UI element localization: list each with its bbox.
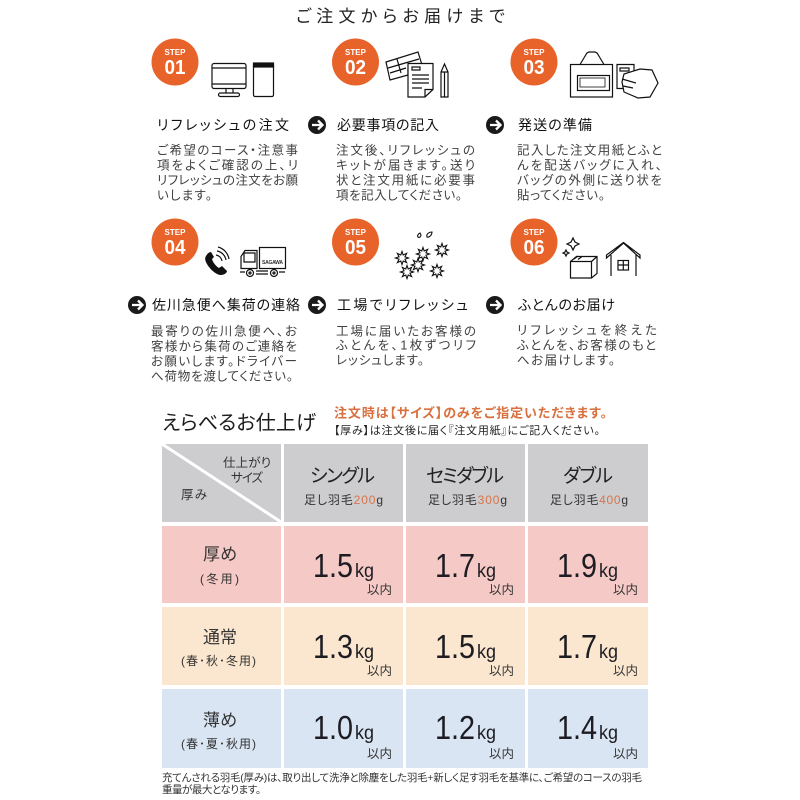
row: thick: kg bbox=[599, 561, 618, 582]
row: thin: 1.4 bbox=[557, 709, 597, 746]
row: thin: 薄め bbox=[203, 711, 237, 730]
order note: 【厚み】は注文後に届く『注文用紙』にご記入ください。 bbox=[334, 423, 600, 437]
badge: step 02: 02 bbox=[345, 57, 366, 79]
row: thin: kg bbox=[477, 723, 496, 744]
text block: ご希望のコース・注意事 bbox=[157, 142, 298, 158]
row: thick: 以内 bbox=[367, 583, 392, 597]
text block: ふとんを、1枚ずつリフ bbox=[335, 338, 476, 352]
text block: 注文後、リフレッシュの bbox=[336, 144, 475, 158]
text block: バッグの外側に送り状を bbox=[517, 172, 662, 188]
text block: レッシュします。 bbox=[336, 354, 424, 368]
text block: リフレッシュを終えた bbox=[517, 322, 657, 338]
row: normal: 以内 bbox=[613, 664, 638, 678]
badge: step 06: 06 bbox=[524, 237, 544, 259]
text block: お願いします。ドライバー bbox=[151, 354, 297, 368]
text block: んを配送バッグに入れ、 bbox=[517, 158, 662, 172]
row: thick: (冬用) bbox=[200, 571, 239, 586]
row: normal: 以内 bbox=[367, 664, 392, 678]
title: ご注文からお届けまで bbox=[296, 7, 505, 26]
panel: step 6 bbox=[486, 218, 657, 368]
badge: step 03: 03 bbox=[524, 57, 544, 79]
row: thin: 以内 bbox=[367, 747, 392, 761]
badge: step 04: STEP bbox=[165, 228, 186, 237]
icon: phone bbox=[205, 247, 229, 275]
order note bbox=[334, 406, 607, 437]
badge: step 03 bbox=[510, 38, 558, 86]
row: thin: 1.2 bbox=[435, 709, 475, 746]
row: normal: 通常 bbox=[203, 628, 237, 647]
text block bbox=[151, 324, 297, 384]
badge: step 01: STEP bbox=[165, 48, 186, 57]
text block: 客様から集荷のご連絡を bbox=[151, 338, 297, 354]
row: thin: 1.0 bbox=[313, 709, 353, 746]
row: thin: kg bbox=[355, 723, 374, 744]
panel: step 4 bbox=[128, 218, 300, 384]
table bbox=[162, 444, 648, 768]
panel: step 5 bbox=[308, 218, 476, 368]
header row: 厚み bbox=[181, 488, 207, 502]
row: thick: 以内 bbox=[489, 583, 514, 597]
header row: 足し羽毛200g bbox=[304, 493, 383, 507]
header row: 足し羽毛400g bbox=[550, 493, 628, 507]
text block: へ荷物を渡してください。 bbox=[151, 370, 293, 384]
row: normal: 1.5 bbox=[435, 628, 475, 665]
icon: monitor and smartphone bbox=[212, 63, 274, 96]
badge: step 01 bbox=[152, 38, 198, 86]
footnote: 充てんされる羽毛(厚み)は、取り出して洗浄と除塵をした羽毛+新しく足す羽毛を基準に、ご希望のコースの羽毛 bbox=[162, 771, 642, 784]
header row: シングル bbox=[310, 465, 375, 487]
heading: ふとんのお届け bbox=[517, 297, 615, 313]
section heading: えらべるお仕上げ bbox=[162, 412, 316, 434]
badge: step 02: STEP bbox=[345, 48, 367, 57]
row: thick: 1.5 bbox=[313, 547, 353, 584]
text block: 貼ってください。 bbox=[517, 188, 605, 202]
heading: 佐川急便へ集荷の連絡 bbox=[152, 297, 300, 313]
panel: step 1 bbox=[152, 38, 298, 202]
row: thick: 厚め bbox=[203, 545, 237, 564]
text block: へお届けします。 bbox=[517, 354, 615, 368]
header row: サイズ bbox=[231, 470, 263, 485]
row: thick bbox=[162, 526, 648, 603]
arrow bbox=[128, 296, 146, 314]
heading: 必要事項の記入 bbox=[337, 117, 439, 133]
row: normal: 1.3 bbox=[313, 628, 353, 665]
icon: box with sparkles bbox=[563, 238, 597, 278]
text block: リフレッシュの注文をお願 bbox=[157, 174, 298, 188]
arrow bbox=[486, 296, 504, 314]
icon: house bbox=[606, 242, 640, 276]
row: thin: 以内 bbox=[613, 747, 638, 761]
row: thick: 1.7 bbox=[435, 547, 475, 584]
row: thick: kg bbox=[355, 561, 374, 582]
icon: truck bbox=[240, 248, 286, 276]
row: thick: 1.9 bbox=[557, 547, 597, 584]
badge: step 04: 04 bbox=[164, 237, 186, 259]
badge: step 06: STEP bbox=[524, 228, 545, 237]
header row bbox=[162, 444, 648, 522]
row: normal: kg bbox=[599, 642, 618, 663]
arrow bbox=[486, 116, 504, 134]
heading: リフレッシュの注文 bbox=[157, 117, 289, 133]
header row: ダブル bbox=[563, 464, 613, 487]
footnote bbox=[162, 771, 642, 796]
row: thick: 以内 bbox=[613, 583, 638, 597]
icon: sparkling dust bbox=[396, 232, 448, 278]
text block: 項をよくご確認の上、リ bbox=[157, 158, 298, 172]
row: normal bbox=[162, 607, 648, 685]
panel: step 3 bbox=[486, 38, 662, 202]
row: thin: kg bbox=[599, 723, 618, 744]
badge: step 02 bbox=[332, 38, 379, 86]
row: normal: (春･秋･冬用) bbox=[181, 653, 256, 668]
text block: 記入した注文用紙とふと bbox=[517, 144, 662, 158]
text block: ふとんを、お客様のもと bbox=[516, 338, 656, 352]
row: thin: 以内 bbox=[489, 747, 514, 761]
badge: step 06 bbox=[510, 218, 558, 266]
text block bbox=[336, 144, 475, 202]
text block: いします。 bbox=[157, 188, 212, 202]
footnote: 重量が最大となります。 bbox=[162, 783, 261, 796]
badge: step 05: 05 bbox=[345, 237, 366, 259]
text block bbox=[517, 144, 662, 202]
panel: step 2 bbox=[308, 38, 475, 202]
header row: セミダブル bbox=[426, 464, 504, 487]
badge: step 04 bbox=[152, 218, 198, 266]
icon: truck: SAGAWA bbox=[262, 260, 283, 266]
text block bbox=[157, 142, 298, 202]
arrow bbox=[308, 296, 326, 314]
icon: delivery bag and hand bbox=[570, 52, 658, 98]
row: thick: kg bbox=[477, 561, 496, 582]
text block: 状と注文用紙に必要事 bbox=[336, 174, 475, 188]
header row: 足し羽毛300g bbox=[428, 493, 507, 507]
text block: 工場に届いたお客様の bbox=[336, 324, 476, 338]
row: normal: 以内 bbox=[489, 664, 514, 678]
row: normal: kg bbox=[477, 642, 496, 663]
text block: 項を記入してください。 bbox=[336, 188, 462, 202]
text block: 最寄りの佐川急便へ、お bbox=[151, 324, 297, 338]
header row: 仕上がり bbox=[223, 455, 271, 470]
icon: forms and pencil bbox=[386, 52, 448, 97]
order note: 注文時は【サイズ】のみをご指定いただきます。 bbox=[334, 406, 607, 420]
badge: step 03: STEP bbox=[524, 48, 545, 57]
text block bbox=[516, 322, 657, 368]
heading: 発送の準備 bbox=[518, 117, 592, 133]
row: thin: (春･夏･秋用) bbox=[181, 737, 256, 751]
row: thin bbox=[162, 689, 648, 768]
row: normal: 1.7 bbox=[557, 628, 597, 665]
text block bbox=[335, 324, 476, 368]
arrow bbox=[308, 116, 326, 134]
badge: step 01: 01 bbox=[164, 57, 186, 79]
text block: キットが届きます。送り bbox=[336, 158, 475, 172]
heading: 工場でリフレッシュ bbox=[337, 297, 468, 313]
row: normal: kg bbox=[355, 642, 374, 663]
badge: step 05 bbox=[332, 218, 379, 266]
badge: step 05: STEP bbox=[345, 228, 367, 237]
